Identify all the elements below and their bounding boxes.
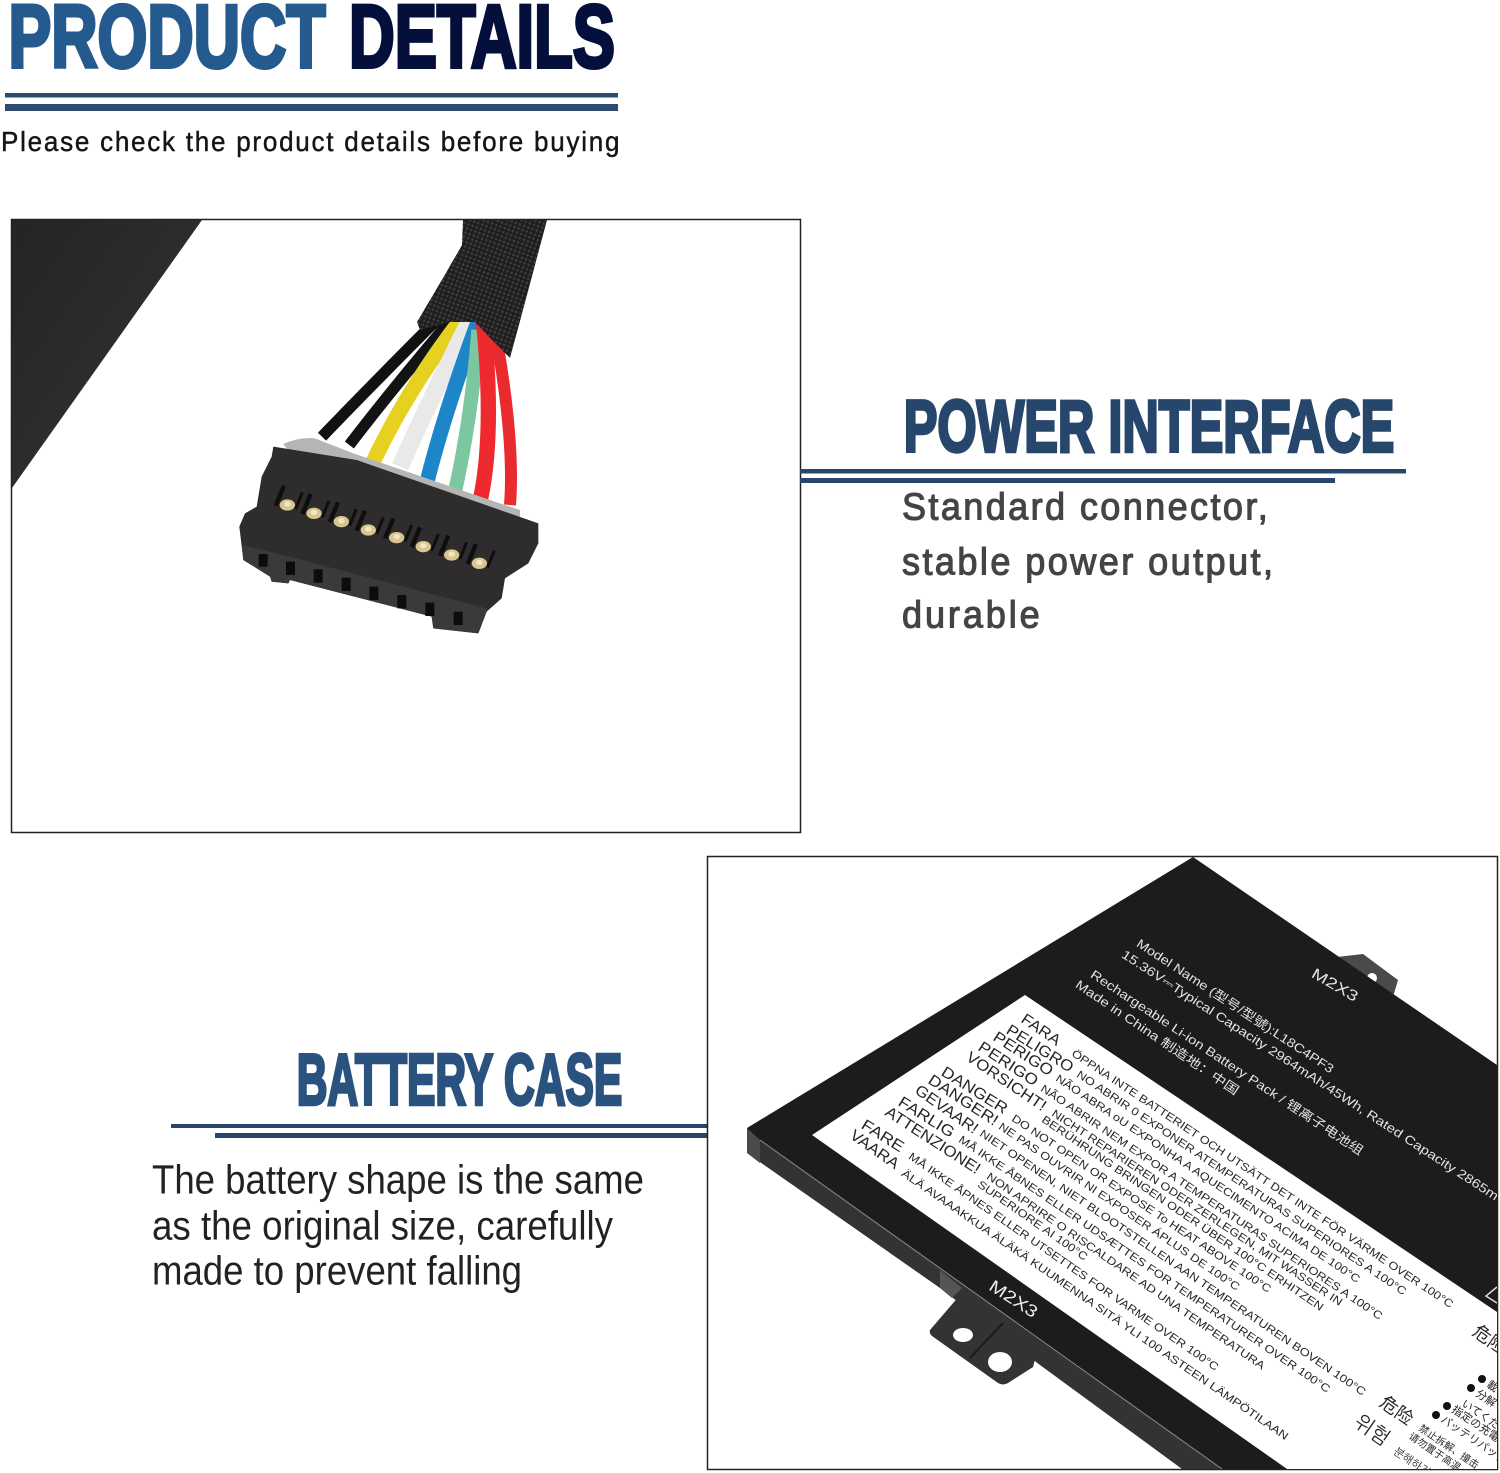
CJK warning text: 禁止拆解、撞击 — [1416, 1422, 1482, 1472]
warning label — [812, 995, 1497, 1469]
warning body text: ÄLÄ AVAAAKKUA ÄLÄKÄ KUUMENNA SITÄ YLI 100 ASTEEN LÄMPÖTILAAN — [899, 1168, 1290, 1443]
warning words: GEVAAR! — [912, 1082, 981, 1138]
text: battery case description: made to prevent falling — [152, 1248, 522, 1294]
warning words: FARE — [858, 1117, 907, 1156]
warning words: PERIGO — [990, 1029, 1056, 1080]
warning body text — [899, 1048, 1455, 1443]
battery model text: Model Name (型号/型號):L18C4PF3 — [1134, 936, 1337, 1076]
text: battery case description — [152, 1156, 644, 1294]
connector body — [239, 438, 538, 633]
lower holes — [259, 554, 463, 625]
CJK warning text: 危险 — [1376, 1392, 1417, 1429]
battery model text: M2X3 — [1308, 965, 1361, 1006]
contact pins — [276, 486, 494, 569]
battery — [747, 857, 1500, 1473]
CJK warning text: 指定の充電 — [1449, 1402, 1500, 1444]
edge highlight — [760, 1140, 1222, 1469]
warning body text: NON APRIRE O RISCALDARE AD UNA TEMPERATURA — [984, 1171, 1267, 1373]
warning words: DANGER — [938, 1064, 1011, 1118]
battery model text: Rechargeable Li-ion Battery Pack / 锂离子电池组 — [1088, 967, 1366, 1158]
connector with wires — [239, 220, 547, 633]
upper mounting tab — [1337, 954, 1398, 997]
warning words: VAARA — [847, 1127, 903, 1173]
warning words: PERIGO — [975, 1039, 1041, 1090]
battery model text: M2X3 — [986, 1276, 1041, 1322]
warning body text: DO NOT OPEN OR EXPOSE To HEAT ABOVE 100°C — [1009, 1113, 1273, 1296]
panel: power interface photo — [12, 220, 800, 832]
warning body text: NO ABRIR 0 EXPONER ATEMPERATURAS SUPERIORES A 100°C — [1074, 1069, 1408, 1298]
text: battery case description: The battery shape is the same — [152, 1156, 644, 1202]
battery model text — [986, 936, 1500, 1322]
battery model text: 15.36V⎓Typical Capacity 2964mAh/45Wh, Rated Capacity 2865m — [1119, 947, 1500, 1203]
battery model text: Made in China 制造地：中国 — [1073, 977, 1242, 1098]
panel: battery case photo — [708, 856, 1500, 1473]
wire sleeve — [417, 220, 547, 358]
warning body text: NÃO ABRA oU EXPONHA A AQUECIMENTO ACIMA DE 100°C — [1053, 1072, 1363, 1286]
warning words — [847, 1011, 1076, 1178]
text: battery case description: as the original size, carefully — [152, 1202, 613, 1248]
title underline — [5, 93, 618, 111]
power interface divider — [800, 469, 1406, 483]
warning words: FARLIG — [895, 1094, 957, 1141]
text: power interface description: stable power output, — [902, 540, 1273, 583]
label corner mark — [1486, 1287, 1497, 1303]
text: power interface description — [902, 485, 1273, 636]
text: power interface description: Standard connector, — [902, 485, 1268, 528]
CJK warning text: 请勿置于高温 — [1406, 1430, 1463, 1473]
CJK warning text: 위험 — [1351, 1411, 1394, 1449]
warning body text: ÖPPNA INTE BATTERIET OCH UTSÄTT DET INTE FÖR VÄRME OVER 100°C — [1069, 1048, 1455, 1311]
battery corner — [12, 220, 202, 488]
warning body text: MÅ IKKE ÅBNES ELLER UDSÆTTES FOR TEMPERATURER OVER 100°C — [956, 1133, 1333, 1396]
warning body text: NE PAS OUVRIR NI EXPOSER ÁPLUS DE 100°C — [996, 1120, 1242, 1294]
battery case divider — [171, 1124, 707, 1138]
text: power interface description: durable — [902, 593, 1040, 636]
CJK warning text: 載 — [1484, 1378, 1500, 1395]
warning body text: NICHT REPARIEREN ODER ZERLEGEN, MIT WASSER IN — [1049, 1108, 1344, 1309]
warning body text: SUPERIORE AI 100°C — [975, 1179, 1090, 1263]
warning body text: NÃO ABRIR NEM EXPOR A TEMPERATURAS SUPERIORES A 100°C — [1038, 1082, 1385, 1323]
heading: battery case: BATTERY CASE — [297, 1040, 622, 1120]
lower mounting tab — [930, 1294, 1038, 1384]
wires — [322, 307, 511, 505]
warning body text: NIET OPENEN, NIET BLOOTSTELLEN AAN TEMPERATUREN BOVEN 100°C — [977, 1128, 1368, 1399]
battery top face — [747, 857, 1497, 1469]
subtitle: Please check the product details before buying — [1, 126, 619, 157]
CJK warning text: 分解 — [1473, 1386, 1499, 1410]
warning words: VORSICHT! — [963, 1049, 1049, 1115]
warning words: PELIGRO — [1003, 1022, 1076, 1076]
warning words: FARA — [1018, 1011, 1064, 1050]
warning words: ATTENZIONE! — [882, 1104, 983, 1178]
warning body text: MÅ IKKE ÅPNES ELLER UTSETTES FOR VARME OVER 100°C — [906, 1150, 1221, 1374]
CJK warning text — [1356, 1325, 1497, 1469]
warning words: DANGER! — [925, 1072, 1001, 1129]
warning body text: BERÜHRUNG BRINGEN ODER ÜBER 100°C ERHITZEN — [1039, 1114, 1325, 1314]
battery side edge — [747, 1128, 1222, 1469]
